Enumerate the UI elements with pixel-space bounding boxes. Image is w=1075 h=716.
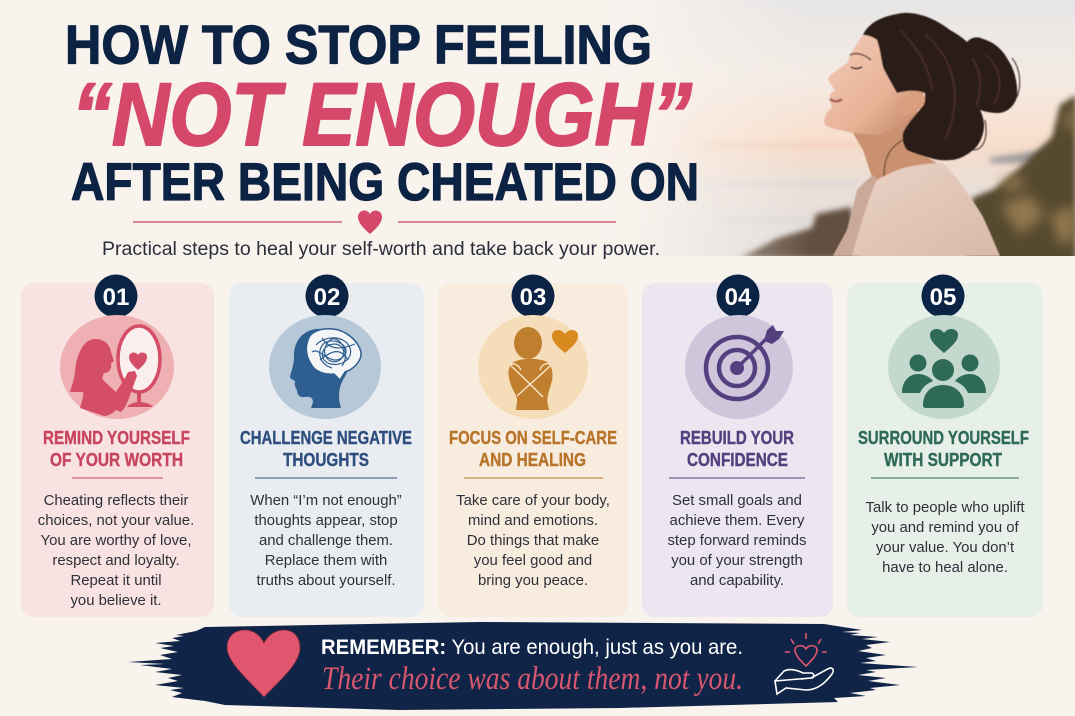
text block: your value. You don’t: [876, 540, 1015, 556]
callout text: Their choice was about them, not you.: [322, 661, 743, 697]
banner: remember: [128, 622, 918, 710]
heading: CONFIDENCE: [687, 449, 788, 470]
number badge 02: [306, 274, 348, 318]
callout text: REMEMBER: You are enough, just as you are.: [321, 636, 743, 659]
text block: Cheating reflects their: [44, 493, 188, 509]
panel: step 4: [642, 274, 833, 617]
heading: AND HEALING: [479, 449, 586, 470]
subtitle: Practical steps to heal your self-worth and take back your power.: [102, 239, 660, 260]
heading: [43, 427, 190, 470]
icon: head with tangled thoughts: [269, 315, 381, 419]
panel: step 2: [229, 274, 424, 617]
heading: CHALLENGE NEGATIVE: [240, 427, 412, 448]
text block: Repeat it until: [70, 573, 162, 589]
text block: When “I’m not enough”: [250, 493, 402, 509]
heading: [858, 427, 1029, 470]
number badge 05: [922, 274, 964, 318]
title: HOW TO STOP FEELING: [65, 14, 652, 76]
heading: OF YOUR WORTH: [50, 449, 183, 470]
text block: you believe it.: [70, 593, 162, 609]
number badge 04: [716, 274, 760, 318]
text block: [38, 493, 194, 609]
text block: truths about yourself.: [256, 573, 396, 589]
callout text: [321, 636, 743, 697]
text block: [456, 493, 610, 589]
number badge 01: [94, 274, 138, 318]
text block: thoughts appear, stop: [254, 513, 398, 529]
brush stroke: [128, 622, 918, 710]
text block: [250, 493, 402, 589]
number badge 03: [512, 274, 554, 318]
text block: [667, 493, 807, 589]
icon: self hug with heart: [478, 315, 588, 419]
woman: [824, 13, 1020, 256]
text block: Talk to people who uplift: [866, 500, 1025, 516]
hero photo: woman breathing by the sea: [664, 0, 1075, 256]
heading: SURROUND YOURSELF: [858, 427, 1029, 448]
number badge 05: 05: [930, 284, 956, 311]
text block: [866, 500, 1025, 576]
heading: REMIND YOURSELF: [43, 427, 190, 448]
heading: FOCUS ON SELF-CARE: [449, 427, 617, 448]
text block: step forward reminds: [667, 533, 807, 549]
heading: [449, 427, 617, 470]
text block: and challenge them.: [259, 533, 393, 549]
icon: hand holding heart: [775, 633, 833, 694]
heading: [680, 427, 794, 470]
divider with heart: [133, 210, 616, 234]
heading: REBUILD YOUR: [680, 427, 794, 448]
text block: respect and loyalty.: [52, 553, 180, 569]
text block: Do things that make: [467, 533, 599, 549]
text block: achieve them. Every: [670, 513, 805, 529]
panel: step 1: [21, 274, 214, 617]
heading: [240, 427, 412, 470]
text block: Set small goals and: [672, 493, 802, 509]
title: AFTER BEING CHEATED ON: [71, 153, 699, 212]
text block: mind and emotions.: [468, 513, 598, 529]
icon: woman and mirror: [60, 315, 174, 419]
text block: and capability.: [690, 573, 784, 589]
text block: you and remind you of: [871, 520, 1020, 536]
text block: you of your strength: [671, 553, 803, 569]
text block: choices, not your value.: [38, 513, 194, 529]
icon: large heart: [227, 630, 300, 697]
text block: you feel good and: [474, 553, 592, 569]
number badge 01: 01: [103, 284, 129, 311]
text block: have to heal alone.: [882, 560, 1008, 576]
text block: bring you peace.: [478, 573, 588, 589]
panel: step 3: [438, 274, 628, 617]
text block: You are worthy of love,: [41, 533, 191, 549]
number badge 02: 02: [314, 284, 340, 311]
number badge 04: 04: [725, 284, 752, 311]
panel: step 5: [847, 274, 1043, 617]
heading: WITH SUPPORT: [884, 449, 1003, 470]
number badge 03: 03: [520, 284, 546, 311]
title: [65, 14, 699, 212]
icon: target with arrow: [685, 315, 793, 419]
icon: supportive group: [888, 315, 1000, 419]
text block: Take care of your body,: [456, 493, 610, 509]
text block: Replace them with: [265, 553, 387, 569]
heading: THOUGHTS: [283, 449, 369, 470]
title: “NOT ENOUGH”: [72, 64, 692, 164]
